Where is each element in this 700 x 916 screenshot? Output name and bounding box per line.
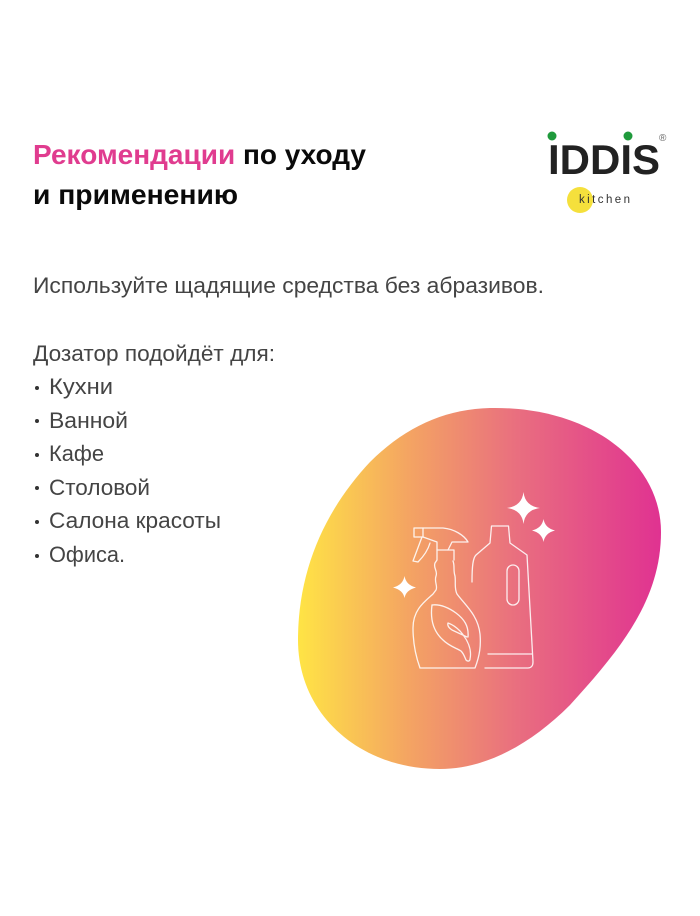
icon: spray bottle xyxy=(413,528,480,668)
usage list: Дозатор подойдёт для: xyxy=(33,341,275,366)
icon: cleaning bottles xyxy=(413,526,533,668)
intro text: Используйте щадящие средства без абразивов. xyxy=(33,273,544,298)
usage list: Кухни xyxy=(49,374,113,399)
usage list: Кафе xyxy=(49,441,104,466)
usage list xyxy=(33,341,275,567)
logo: IDDIS kitchen: ® xyxy=(659,133,667,144)
logo: IDDIS kitchen: IDDIS xyxy=(548,136,660,183)
logo: IDDIS kitchen: kitchen xyxy=(579,194,630,206)
logo: IDDIS kitchen xyxy=(548,132,667,213)
usage list: Ванной xyxy=(49,408,128,433)
icon: large bottle xyxy=(472,526,533,668)
title: и применению xyxy=(33,179,238,210)
usage list: Столовой xyxy=(49,475,150,500)
gradient blob xyxy=(298,408,661,769)
title: Рекомендации по уходу xyxy=(33,139,366,170)
icon: sparkles xyxy=(393,492,555,598)
usage list: Офиса. xyxy=(49,542,125,567)
usage list: Салона красоты xyxy=(49,508,221,533)
title xyxy=(33,139,366,210)
